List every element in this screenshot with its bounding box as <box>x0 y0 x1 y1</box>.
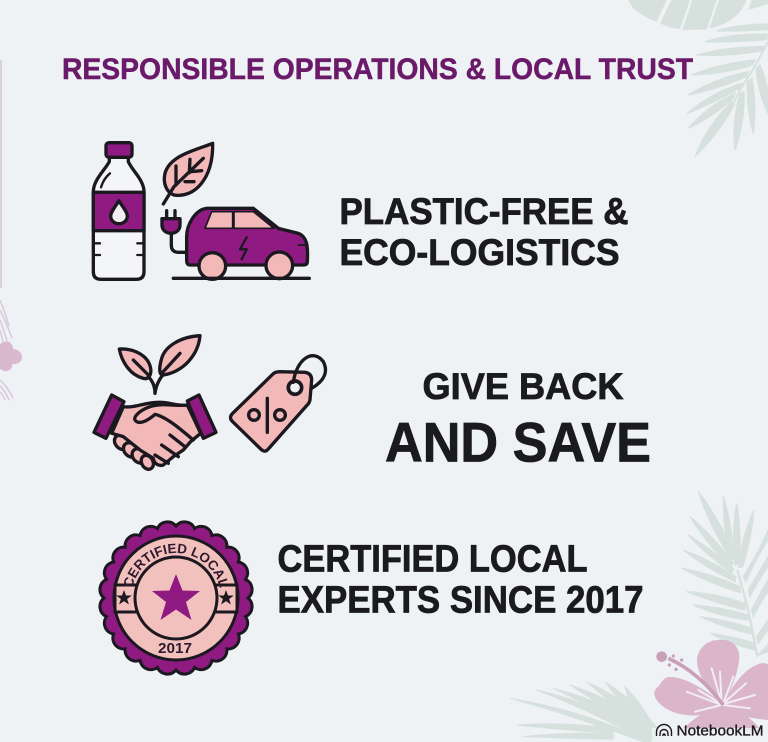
icon: percent price tag <box>230 356 325 451</box>
title: RESPONSIBLE OPERATIONS & LOCAL TRUST <box>62 53 693 86</box>
clasped hands <box>112 402 201 465</box>
text: plastic-free and eco-logistics <box>340 191 628 273</box>
text: give back and save <box>385 366 651 474</box>
car windows <box>205 212 274 228</box>
decoration: bottom right hibiscus <box>654 640 768 732</box>
car door handle <box>298 242 306 247</box>
text: give back and save: GIVE BACK <box>422 366 624 407</box>
wheels <box>199 253 226 279</box>
scalloped edge <box>100 522 252 674</box>
icon: certified local badge <box>98 520 254 676</box>
notebooklm watermark <box>652 722 768 742</box>
icon: water bottle, leaf and electric car <box>93 143 309 279</box>
percent sign <box>249 398 285 432</box>
cable <box>171 233 187 252</box>
decoration: bottom centre palm <box>510 682 658 742</box>
bottle ribs <box>94 243 143 255</box>
stems <box>133 353 180 393</box>
text: certified local experts since 2017: EXPERTS SINCE 2017 <box>278 580 644 622</box>
bottle body <box>93 157 144 279</box>
cuffs <box>94 395 216 438</box>
leaf <box>164 143 213 195</box>
tag body <box>230 372 312 451</box>
text: plastic-free and eco-logistics: ECO-LOGISTICS <box>340 232 620 273</box>
pink disc <box>114 536 238 660</box>
water drop <box>111 201 127 224</box>
plug <box>162 211 180 233</box>
tag hole <box>288 381 302 394</box>
notebooklm label: NotebookLM <box>676 722 764 740</box>
left leaf <box>119 349 151 379</box>
thumb and finger lines <box>135 405 193 463</box>
text: plastic-free and eco-logistics: PLASTIC-FREE & <box>340 191 628 232</box>
bottle cap <box>106 143 132 157</box>
text: certified local experts since 2017: CERTIFIED LOCAL <box>278 538 588 580</box>
year: 2017 <box>158 640 192 657</box>
bottle label band <box>93 192 144 231</box>
car body <box>187 208 308 265</box>
bottle highlight <box>101 173 110 187</box>
notebooklm icon <box>656 725 672 736</box>
text: certified local experts since 2017 <box>278 538 644 622</box>
decoration: bottom right palm <box>682 492 768 657</box>
lightning bolt <box>240 237 247 259</box>
knuckles <box>112 432 156 472</box>
arc text path <box>131 553 221 598</box>
string loop <box>293 356 325 388</box>
decoration: top right palm <box>687 24 768 157</box>
inner circle <box>135 557 217 639</box>
right leaf <box>160 336 200 375</box>
centre star <box>152 574 200 620</box>
decoration: top right monstera leaf <box>628 0 768 30</box>
ground <box>173 273 309 283</box>
certified local text: CERTIFIED LOCAL <box>124 544 228 588</box>
icon: handshake with sprout <box>94 336 216 472</box>
leaf veins <box>163 158 203 204</box>
text: give back and save: AND SAVE <box>385 410 651 474</box>
side band <box>115 585 237 612</box>
decoration: left edge palm and hibiscus <box>0 300 22 400</box>
